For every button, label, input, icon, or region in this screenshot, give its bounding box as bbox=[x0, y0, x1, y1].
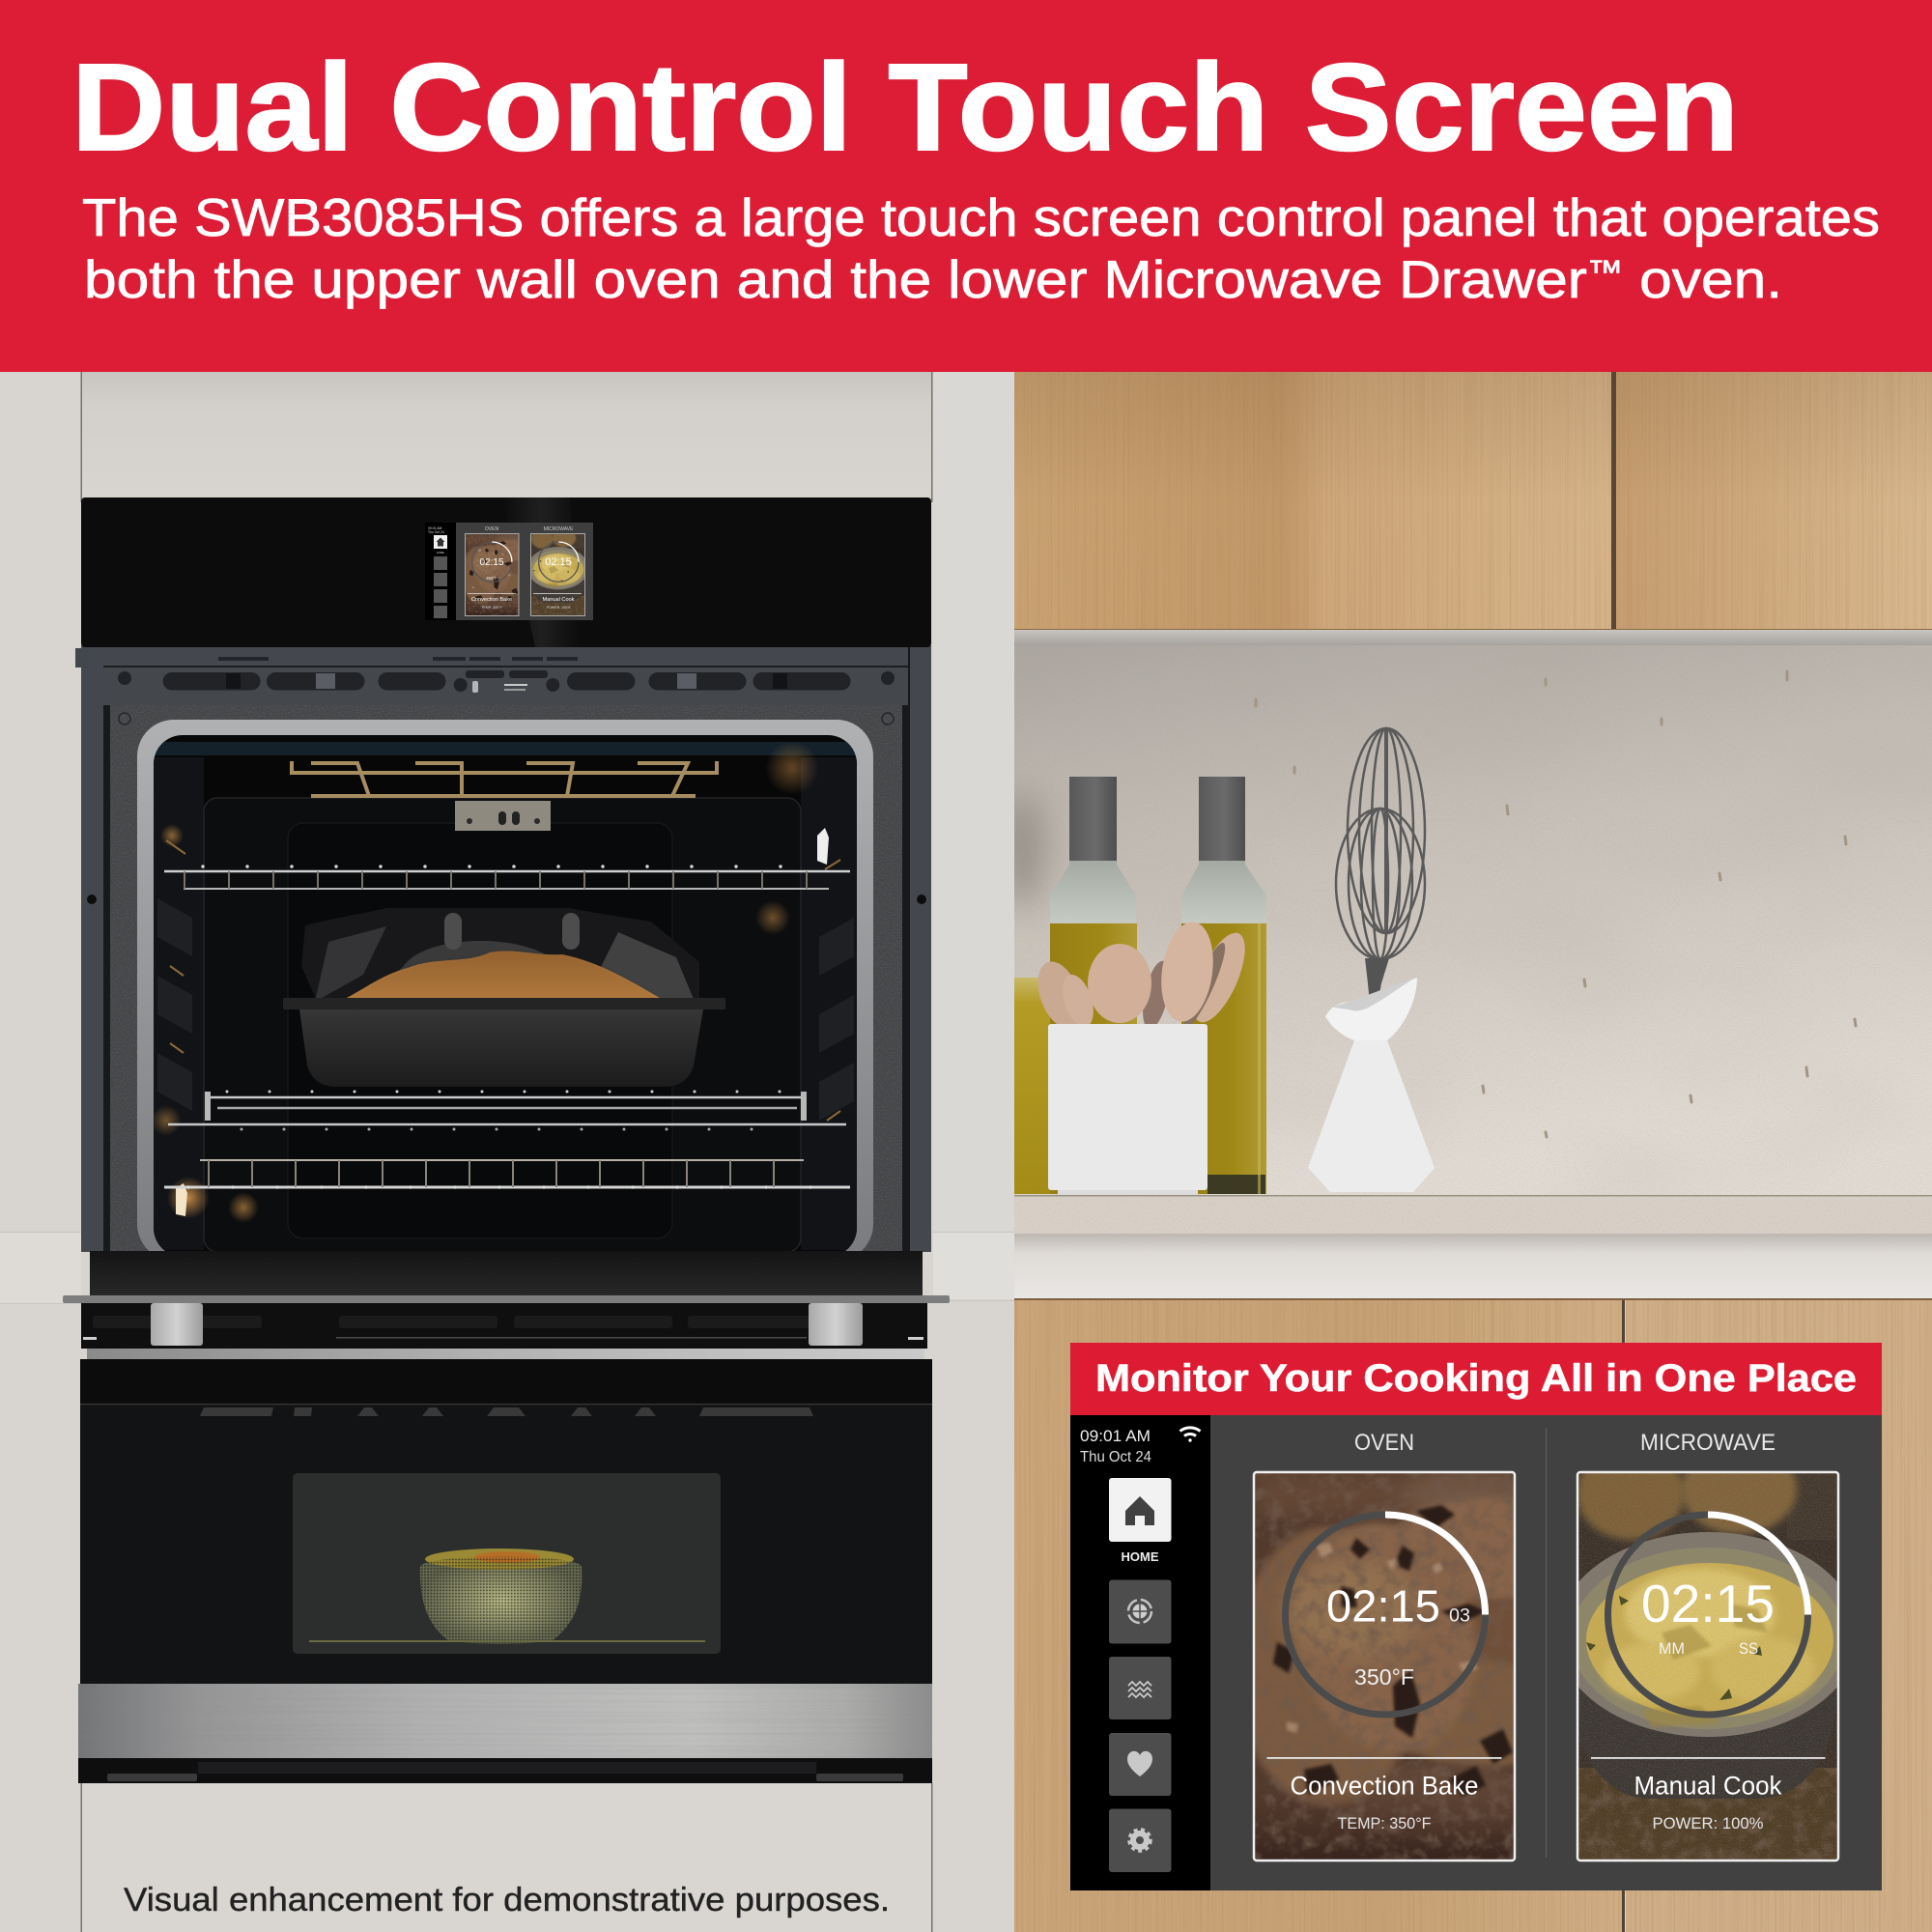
header band bbox=[0, 0, 1932, 372]
oven column: OVEN bbox=[1354, 1430, 1414, 1456]
oven column: 03 bbox=[1449, 1605, 1470, 1627]
icon: home button bbox=[1109, 1478, 1171, 1542]
microwave column: 02:15 bbox=[1641, 1574, 1775, 1634]
mini display on fascia: TEMP: 350°F bbox=[481, 606, 503, 610]
microwave drawer bbox=[78, 1303, 932, 1783]
mini display on fascia: 350°F bbox=[486, 576, 497, 581]
mini display on fascia: POWER: 100% bbox=[547, 606, 571, 610]
mini display on fascia: OVEN bbox=[485, 526, 498, 532]
column divider bbox=[1546, 1428, 1547, 1858]
disclaimer: Visual enhancement for demonstrative purposes. bbox=[124, 1882, 890, 1918]
side reflection of oil bbox=[1014, 978, 1053, 1194]
rack 2 bbox=[168, 1092, 846, 1129]
loaf pan bbox=[283, 998, 725, 1087]
fan cover bbox=[301, 908, 699, 998]
mini display on fascia: HOME bbox=[437, 551, 444, 554]
microwave column: POWER: 100% bbox=[1652, 1814, 1764, 1833]
bowl inside drawer bbox=[309, 1546, 705, 1646]
sidebar: 09:01 AM bbox=[1080, 1428, 1151, 1445]
broiler bracket bbox=[455, 801, 551, 831]
microwave column: MICROWAVE bbox=[1640, 1430, 1776, 1456]
stone shelf bbox=[1014, 1195, 1932, 1234]
oven column: 02:15 bbox=[1326, 1580, 1440, 1631]
oven cavity surround bbox=[110, 705, 902, 1252]
panel: touch screen callout bbox=[1070, 1343, 1882, 1890]
mini display on fascia: MICROWAVE bbox=[544, 526, 574, 532]
broiler element bbox=[292, 761, 717, 796]
rear wall bbox=[204, 798, 801, 1252]
description line 1: The SWB3085HS offers a large touch screen control panel that operates bbox=[82, 187, 1880, 247]
oven column bbox=[1236, 1430, 1579, 1861]
warm reflections on side walls bbox=[151, 741, 854, 1223]
loaf of bread bbox=[340, 951, 665, 1001]
vent teeth bbox=[200, 1407, 813, 1416]
oven column: 350°F bbox=[1354, 1664, 1414, 1690]
oven photo card bbox=[1236, 1470, 1579, 1861]
bottle: rear left bbox=[1050, 777, 1137, 1194]
white ceramic vase bbox=[1308, 978, 1435, 1192]
oven interior bbox=[151, 735, 857, 1257]
microwave column bbox=[1557, 1430, 1859, 1861]
sidebar bbox=[1070, 1415, 1210, 1890]
upper wood cabinets bbox=[1014, 372, 1932, 630]
wooden spoons bbox=[1030, 919, 1256, 1035]
drawer upper fascia bbox=[80, 1359, 932, 1405]
screen body bbox=[1070, 1415, 1882, 1890]
wall band under shelf bbox=[1014, 1234, 1932, 1298]
icon: favorites button bbox=[1109, 1733, 1171, 1796]
icon: wifi bbox=[1180, 1428, 1200, 1442]
icon: settings button bbox=[1109, 1808, 1171, 1872]
door gasket bbox=[137, 720, 873, 1261]
oven column: TEMP: 350°F bbox=[1337, 1814, 1432, 1833]
bottle: rear right bbox=[1181, 777, 1266, 1194]
mini display on fascia: Manual Cook bbox=[543, 597, 575, 603]
white utensil cup bbox=[1048, 1024, 1208, 1195]
drawer bottom edge bbox=[78, 1758, 932, 1783]
callout heading bar: Monitor Your Cooking All in One Place bbox=[1095, 1357, 1857, 1400]
rack 1 bbox=[164, 867, 850, 889]
sidebar: Thu Oct 24 bbox=[1080, 1449, 1151, 1465]
description line 2: ™ bbox=[1587, 254, 1623, 291]
description line 2: both the upper wall oven and the lower Microwave Drawer bbox=[84, 249, 1451, 309]
mini display on fascia: Convection Bake bbox=[471, 597, 512, 603]
oven side frames bbox=[75, 645, 931, 1252]
mini display on fascia: 02:15 bbox=[479, 557, 504, 568]
mini display on fascia: 02:15 bbox=[545, 556, 572, 568]
open oven door bbox=[63, 1251, 950, 1303]
mini display on fascia: Thu Oct 24 bbox=[428, 530, 444, 534]
sidebar: HOME bbox=[1121, 1549, 1159, 1564]
drawer hinge band bbox=[81, 1303, 927, 1349]
wall oven bbox=[63, 497, 950, 1303]
drawer window bbox=[293, 1473, 721, 1654]
callout heading bar bbox=[1070, 1343, 1882, 1415]
description line 2: oven. bbox=[1623, 249, 1782, 309]
drawer black front bbox=[80, 1404, 932, 1684]
icon: convection button bbox=[1109, 1580, 1171, 1644]
cabinet underside bbox=[1014, 630, 1932, 645]
mini display on fascia bbox=[425, 523, 593, 620]
vent strip with pill slots bbox=[103, 645, 908, 705]
chrome trim bar bbox=[87, 1349, 924, 1359]
rack 3 bbox=[164, 1160, 850, 1187]
oven column: Convection Bake bbox=[1291, 1772, 1478, 1801]
title: Dual Control Touch Screen bbox=[71, 39, 1739, 177]
icon: microwave waves button bbox=[1109, 1657, 1171, 1719]
microwave photo card bbox=[1557, 1445, 1859, 1861]
stone backsplash bbox=[1001, 645, 1932, 1195]
microwave column: MM bbox=[1659, 1640, 1685, 1658]
microwave column: SS bbox=[1739, 1640, 1758, 1658]
microwave column: Manual Cook bbox=[1634, 1772, 1782, 1801]
lower wood cabinets bbox=[1014, 1298, 1932, 1932]
wire whisk bbox=[1336, 728, 1425, 1005]
microwave timer ring bbox=[1607, 1515, 1808, 1715]
stainless handle panel bbox=[78, 1684, 932, 1758]
mini display on fascia: 09:01 AM bbox=[428, 526, 442, 530]
control panel fascia bbox=[81, 497, 931, 647]
oven timer ring bbox=[1285, 1515, 1486, 1715]
